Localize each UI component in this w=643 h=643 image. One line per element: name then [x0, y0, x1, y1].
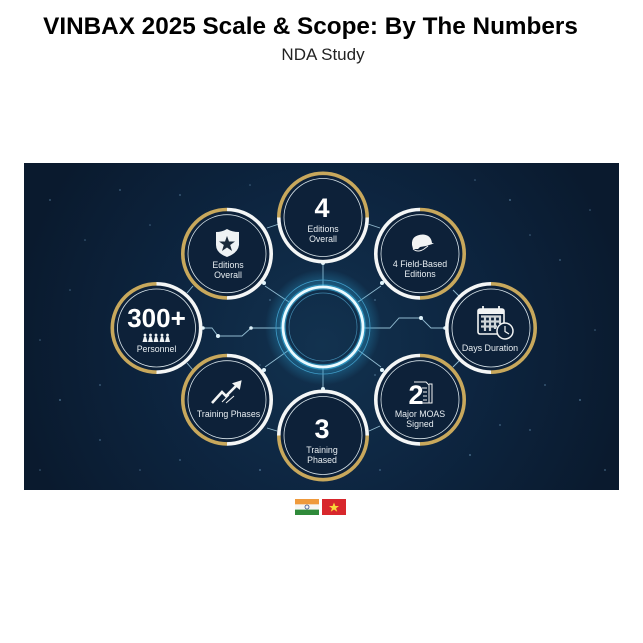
connector lines: [187, 224, 459, 431]
circle: 4 field-based editions: Editions: [404, 269, 436, 279]
connector nodes: [201, 261, 447, 391]
circle: 3 training phased: Training: [306, 445, 338, 455]
circle: editions overall with shield: Overall: [214, 270, 242, 280]
circle: 2 major MOAs signed: Major MOAS: [395, 409, 445, 419]
central glowing ring: [265, 269, 381, 385]
circle: 300+ personnel: Personnel: [137, 344, 176, 354]
icon: shield: [216, 229, 239, 257]
icon: people: [142, 334, 170, 342]
circle: training phases: Training Phases: [197, 409, 261, 419]
title: VINBAX 2025 Scale & Scope: By The Numbers: [43, 13, 578, 40]
circle: 3 training phased: Phased: [307, 455, 337, 465]
circle: days duration: Days Duration: [462, 343, 518, 353]
circle: 4 editions overall: [279, 173, 367, 262]
circle: 4 editions overall: Editions: [307, 224, 339, 234]
circle: 2 major MOAs signed: 2: [408, 380, 424, 410]
icon: documents: [414, 382, 432, 403]
icon: calendar with clock: [478, 306, 513, 339]
circle: 2 major MOAs signed: [376, 356, 464, 444]
circle: editions overall with shield: [183, 210, 271, 298]
subtitle: NDA Study: [281, 45, 365, 64]
circle: 3 training phased: [279, 391, 367, 480]
circle: 4 editions overall: 4: [314, 193, 330, 223]
circle: 300+ personnel: [112, 284, 201, 372]
circle: 2 major MOAs signed: Signed: [406, 419, 434, 429]
circle: editions overall with shield: Editions: [212, 260, 244, 270]
circle: 300+ personnel: 300+: [127, 303, 186, 333]
icon: rising arrow: [212, 381, 241, 403]
icon: helmet: [412, 234, 434, 251]
circle: 4 field-based editions: [376, 210, 464, 298]
circle: 3 training phased: 3: [314, 414, 330, 444]
circle: training phases: [183, 356, 271, 444]
circle: days duration: [447, 284, 535, 372]
circle: 4 field-based editions: 4 Field-Based: [393, 259, 447, 269]
panel: dark background: [24, 163, 619, 490]
star dots: [39, 179, 606, 471]
circle: 4 editions overall: Overall: [309, 234, 337, 244]
icon: India flag: [295, 499, 319, 515]
icon: Vietnam flag: [322, 499, 346, 515]
